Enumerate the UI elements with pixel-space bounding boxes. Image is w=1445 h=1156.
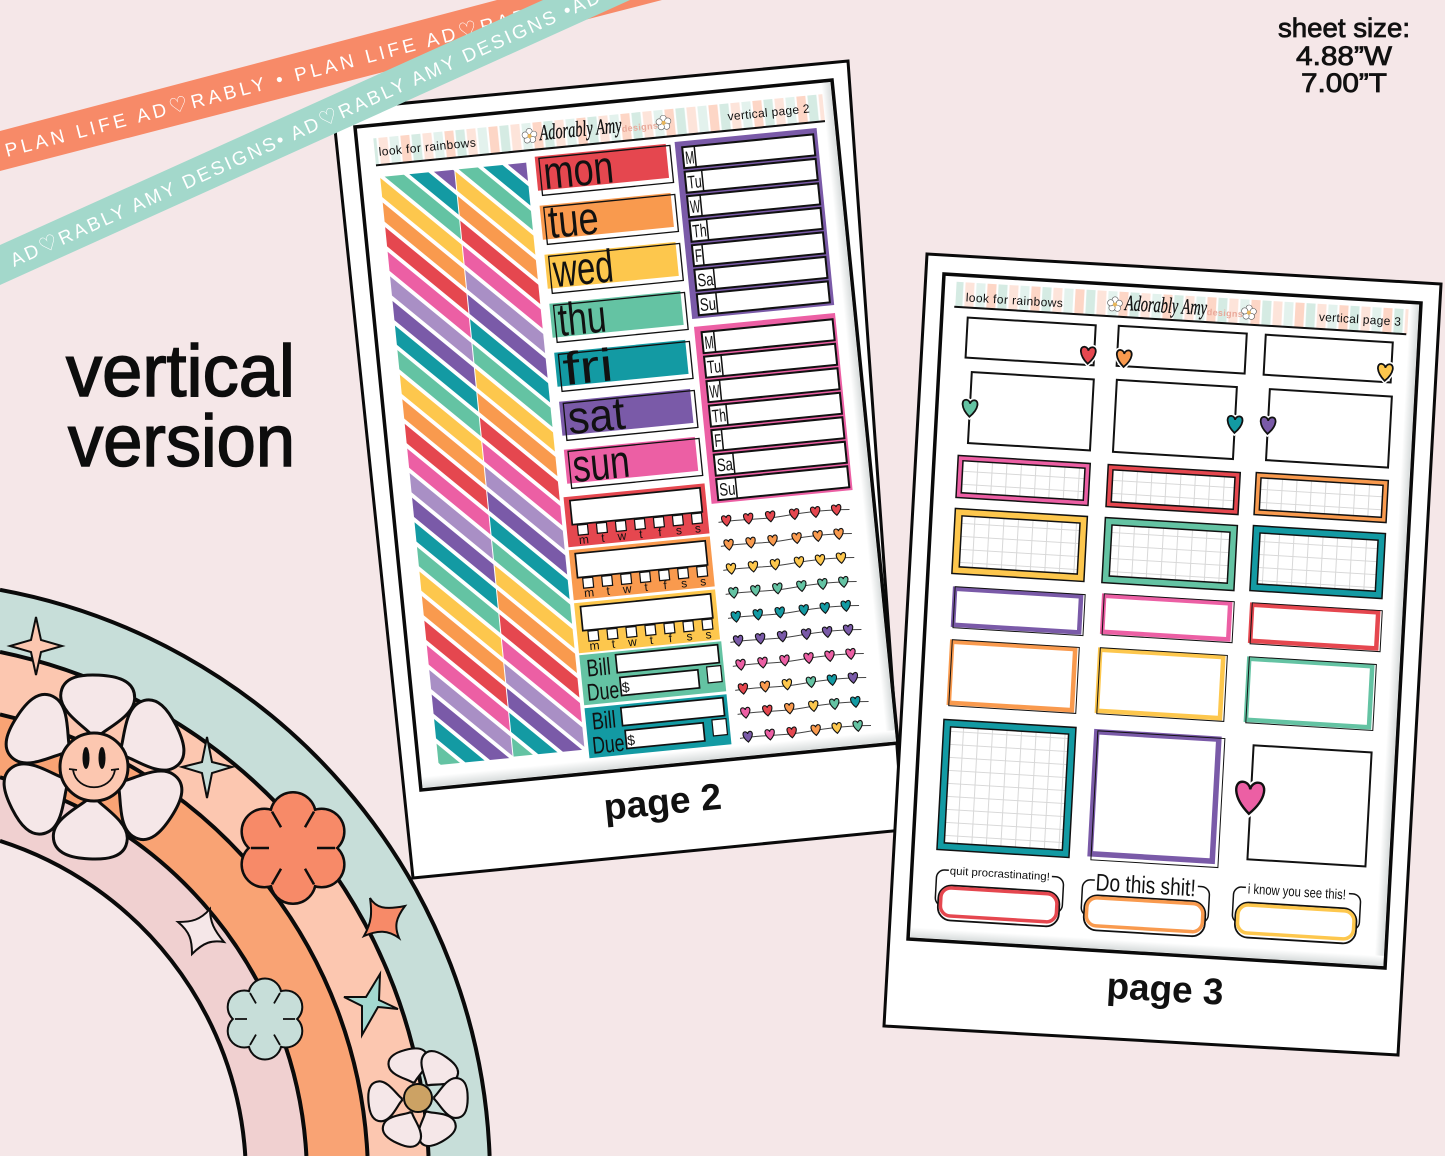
- icon: teal star: [344, 974, 398, 1035]
- orange habit tracker: [569, 536, 715, 601]
- sheet size note: sheet size:: [1278, 13, 1410, 43]
- caption: page 3: page 3: [1106, 965, 1225, 1013]
- small grid boxes: [956, 454, 1388, 524]
- weekday labels: [534, 135, 703, 493]
- header band: look for rainbows: [378, 135, 476, 159]
- do this shit label: Do this shit!: [1095, 869, 1196, 902]
- header band: look for rainbows: [965, 290, 1063, 310]
- sheet: page 2: [333, 59, 904, 878]
- icon: coral star: [364, 898, 405, 938]
- weekday labels: mon: [541, 140, 616, 199]
- weekday labels: sun: [570, 435, 632, 492]
- hearts on boxes: [962, 339, 1393, 442]
- rainbow arcs: [0, 590, 490, 1156]
- teal bill due: [585, 694, 732, 760]
- title: vertical version: [66, 331, 295, 482]
- green bill due: [579, 641, 726, 707]
- weekday labels: wed: [550, 239, 616, 297]
- header band: vertical page 2: [727, 102, 811, 124]
- weekday labels: thu: [555, 290, 609, 346]
- weekday labels: sat: [565, 387, 627, 444]
- header band: Adorably Amy: [537, 112, 623, 145]
- diagonal rainbow strip column 2: [455, 162, 584, 757]
- inner frame: [908, 274, 1421, 968]
- inner frame: [355, 80, 898, 790]
- icon: peach sparkle: [10, 617, 62, 675]
- purple frame square: [1090, 731, 1225, 868]
- weekday labels: fri: [560, 338, 615, 395]
- sticker sheet page 2 contents: [353, 78, 899, 792]
- i know you see this label: [1231, 880, 1361, 944]
- ribbon: teal: [0, 0, 630, 285]
- sheet: page 3: [884, 254, 1441, 1055]
- quit procrastinating label: quit procrastinating!: [949, 865, 1050, 883]
- ribbon: coral: [0, 0, 662, 171]
- purple checklist: [675, 128, 834, 319]
- title: vertical version: version: [68, 401, 295, 482]
- i know you see this label: i know you see this!: [1247, 880, 1346, 902]
- yellow habit tracker: [574, 589, 720, 654]
- sheet size note: 4.88”W: [1296, 41, 1393, 71]
- outline boxes with hearts: [961, 317, 1395, 469]
- title: vertical version: vertical: [66, 331, 295, 412]
- icon: smiley daisy: [0, 673, 193, 861]
- header band: Adorably Amy: [1123, 290, 1208, 320]
- header band: designs: [1207, 307, 1243, 319]
- quit procrastinating label: [934, 865, 1064, 927]
- large grid boxes: [952, 507, 1385, 600]
- sheet outer card: [884, 254, 1441, 1055]
- diagonal rainbow strip column 1: [380, 170, 512, 765]
- colored frames row 2: [949, 639, 1376, 731]
- header band: [954, 280, 1409, 334]
- box with big pink heart: [1232, 744, 1372, 866]
- sheet size note: [1278, 13, 1410, 98]
- icon: pale star: [178, 909, 224, 954]
- heart rows: [718, 503, 871, 743]
- weekday labels: tue: [546, 191, 601, 248]
- icon: small daisy: [367, 1045, 468, 1151]
- red habit tracker: [564, 483, 710, 548]
- do this shit label: [1080, 868, 1210, 937]
- header band: [373, 92, 825, 165]
- header band: vertical page 3: [1319, 310, 1402, 329]
- sticker sheet page 3 contents: [908, 274, 1421, 968]
- icon: mint sparkle: [182, 737, 232, 798]
- sheet size note: 7.00”T: [1301, 68, 1387, 98]
- pink checklist: [694, 313, 853, 504]
- teal grid square: [937, 719, 1076, 857]
- rainbow with flowers and stars: [0, 590, 490, 1156]
- icon: coral flower: [243, 794, 343, 902]
- sheet outer card: [333, 61, 903, 878]
- caption: page 2: page 2: [602, 776, 723, 828]
- header band: designs: [621, 120, 658, 134]
- colored frames row: [953, 585, 1382, 654]
- icon: mint flower: [229, 980, 301, 1058]
- ribbon text: PLAN LIFE AD♡RABLY • PLAN LIFE AD♡RABLY: [2, 0, 560, 162]
